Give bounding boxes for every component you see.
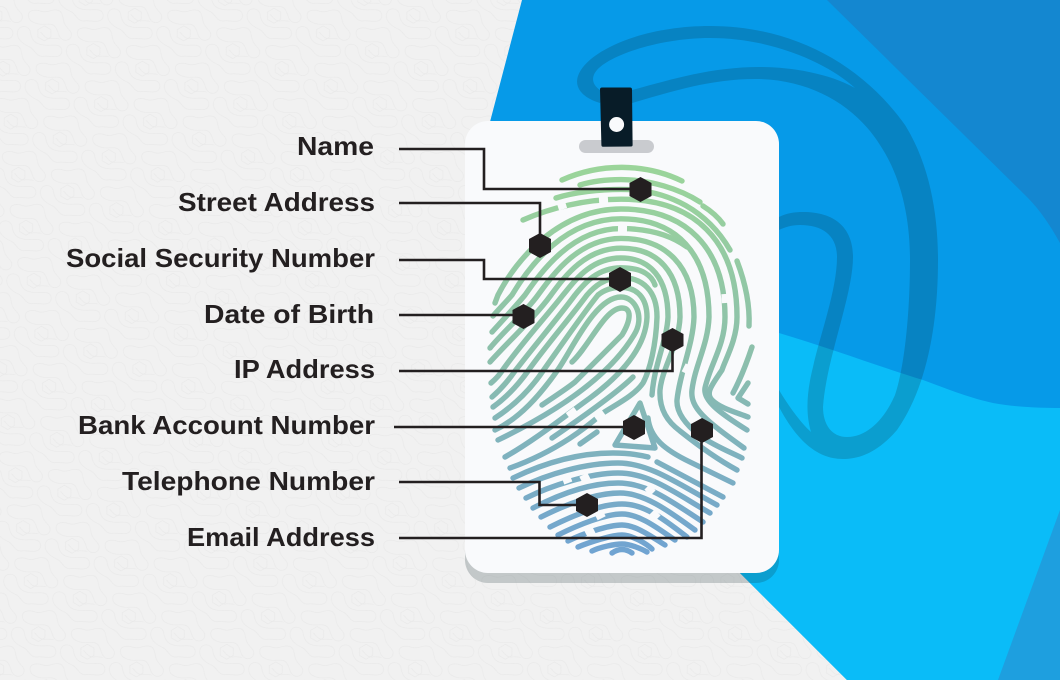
badge clip [579, 88, 654, 153]
label: Telephone Number: Telephone Number [122, 466, 375, 496]
label: Email Address: Email Address [187, 522, 375, 552]
label: Date of Birth: Date of Birth [204, 299, 374, 329]
fingerprint [490, 167, 752, 553]
lanyard [577, 26, 938, 459]
connector lines [394, 149, 702, 538]
label: Bank Account Number: Bank Account Number [78, 410, 375, 440]
label: Street Address: Street Address [178, 187, 375, 217]
label: Social Security Number: Social Security Number [66, 243, 375, 273]
label: Name: Name [297, 131, 374, 161]
label: IP Address: IP Address [234, 354, 375, 384]
marker hexagons [512, 177, 713, 517]
blue background shapes [470, 0, 1060, 680]
fingerprint ridge breaks [558, 200, 726, 534]
badge card [465, 121, 779, 583]
